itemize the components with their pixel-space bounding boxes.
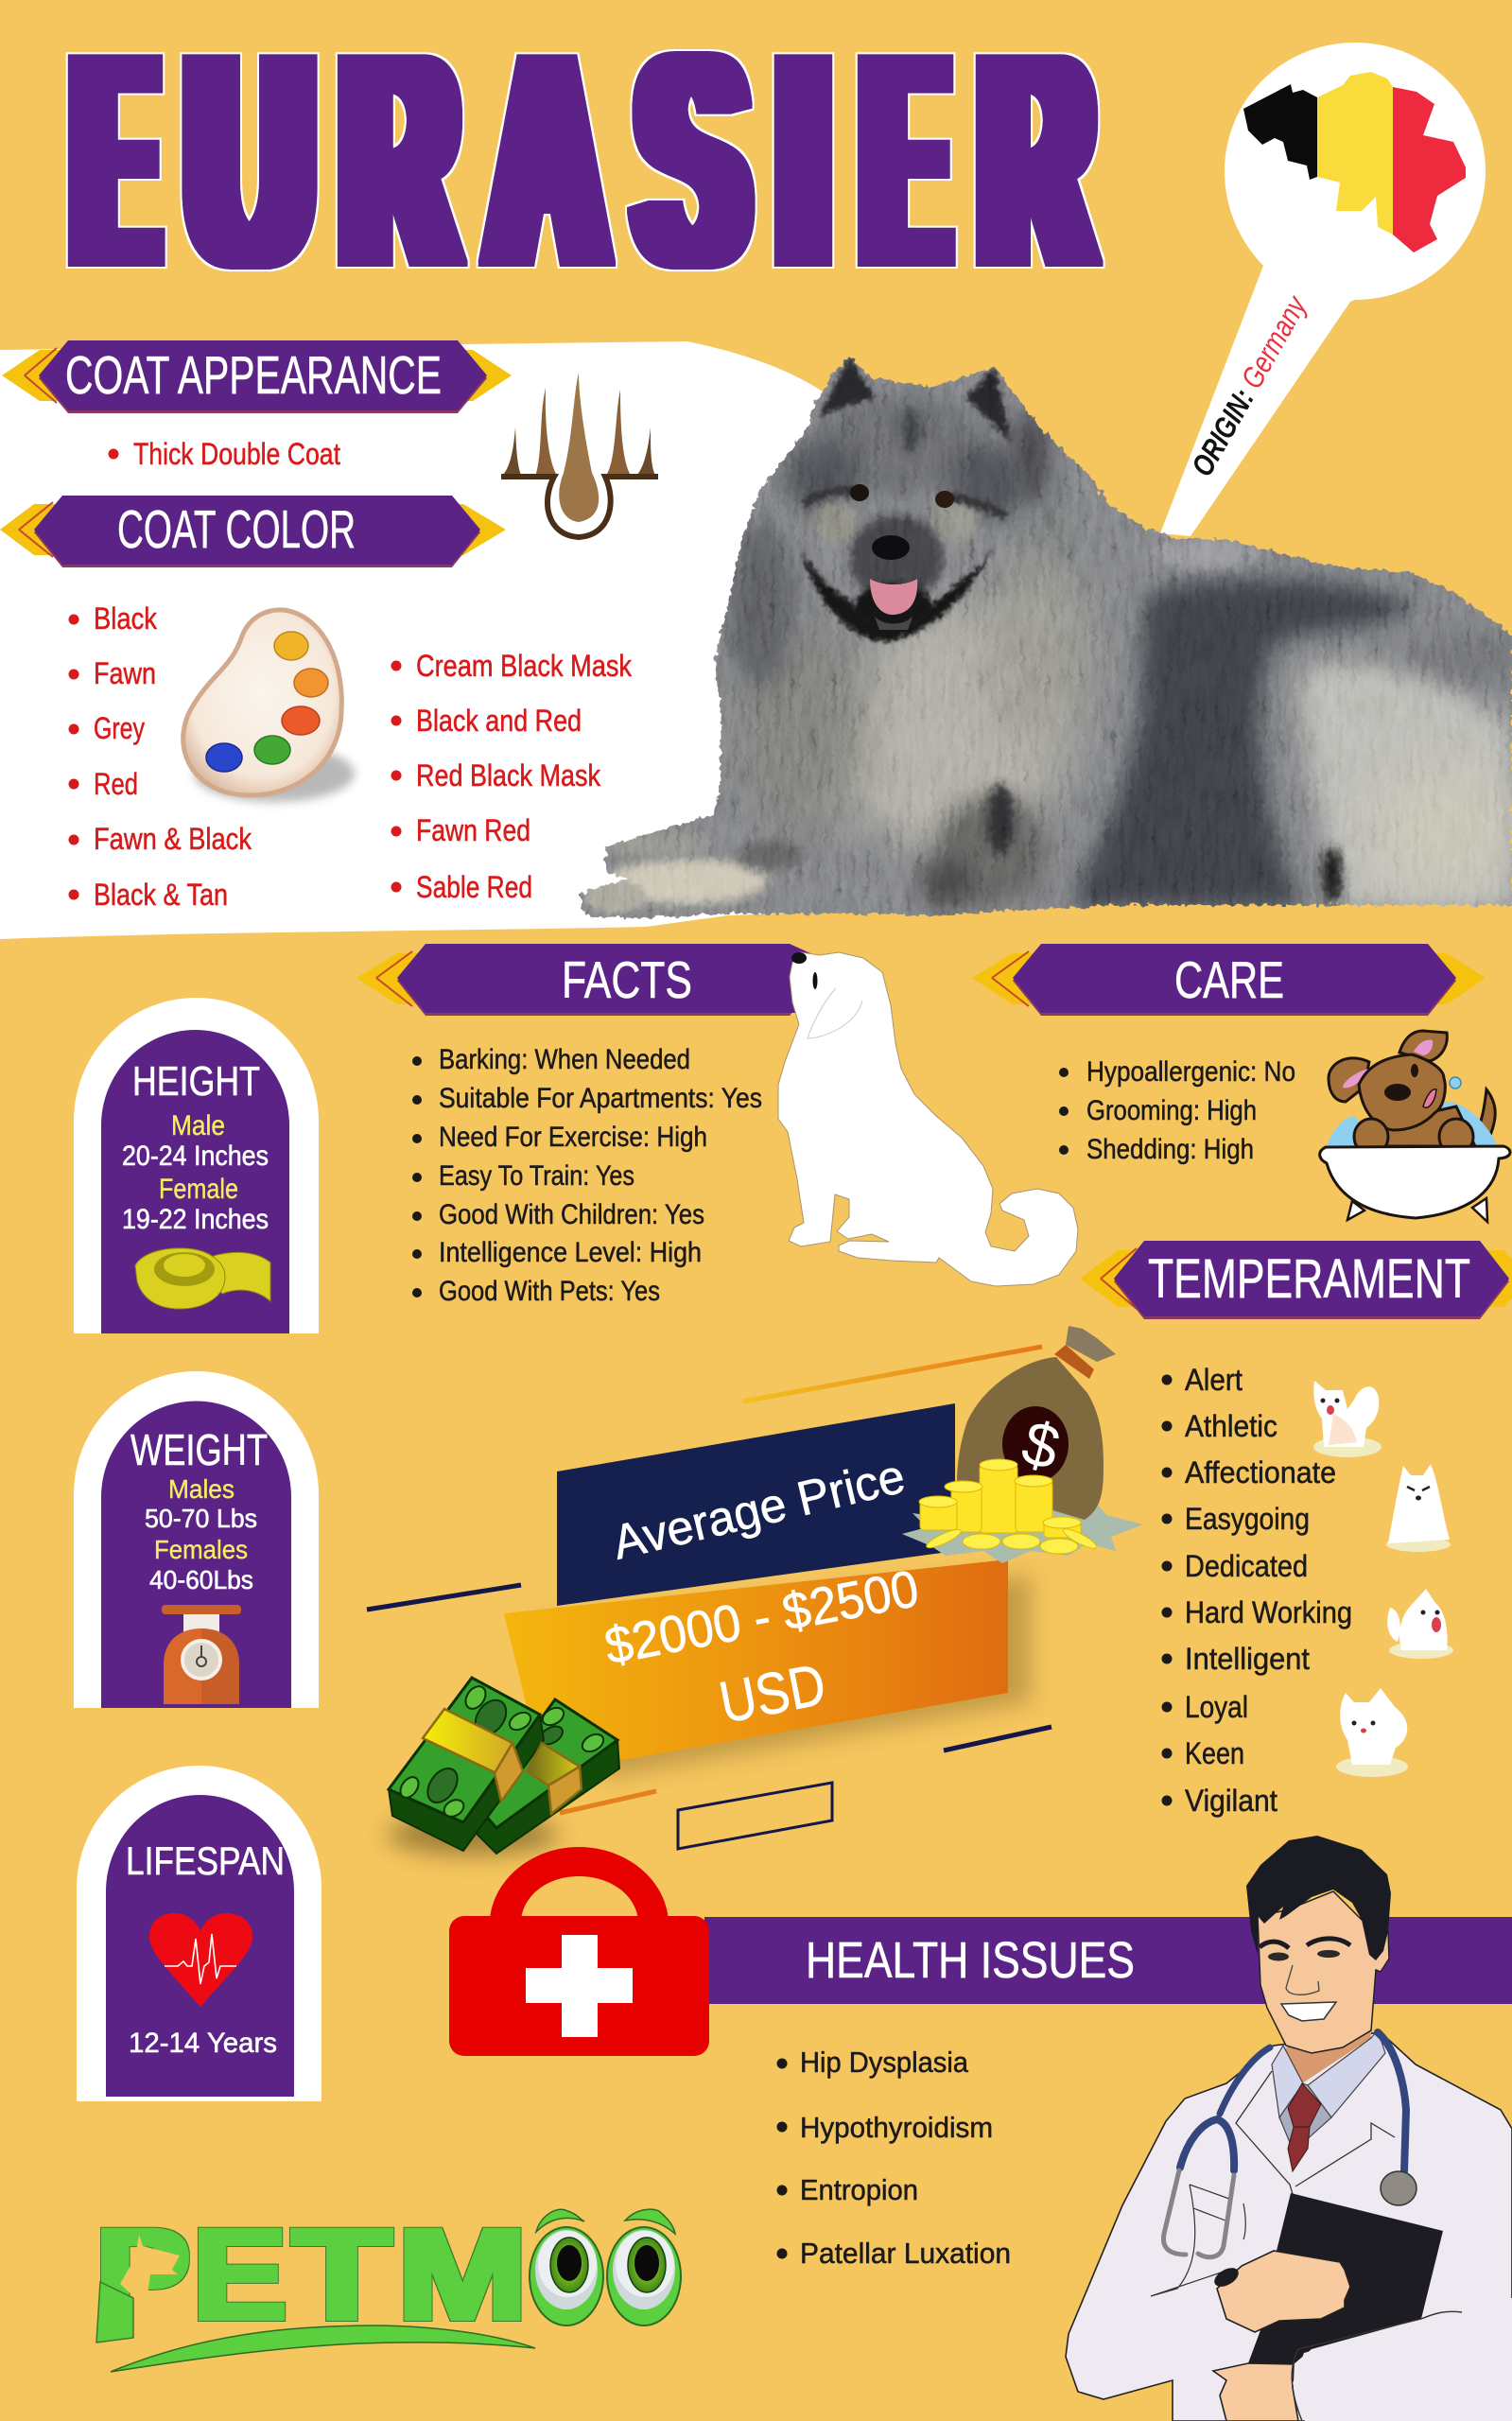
panel: average price bbox=[504, 1403, 1031, 1778]
logo wordmark: E bbox=[193, 2203, 287, 2347]
panel: weight arch: Females bbox=[154, 1535, 248, 1564]
logo wordmark: P bbox=[96, 2203, 190, 2347]
text: coat appearance item: Thick Double Coat bbox=[133, 437, 340, 471]
list: temperament: Alert bbox=[1185, 1363, 1243, 1397]
icon: money bag and coins: $ bbox=[1016, 1406, 1067, 1483]
shirt collar bbox=[1272, 2030, 1385, 2151]
banner: health issues band bbox=[704, 1917, 1512, 2004]
panel: height arch: HEIGHT bbox=[132, 1058, 260, 1105]
list: coat colors left: Fawn bbox=[94, 656, 156, 690]
banner: coat appearance bbox=[2, 340, 512, 413]
origin map pin bbox=[1160, 43, 1486, 536]
banner: care bbox=[972, 944, 1486, 1016]
logo eyes bbox=[530, 2209, 681, 2325]
icon: map of Belgium flag colours bbox=[1243, 72, 1466, 253]
icon: money bag and coins bbox=[902, 1326, 1143, 1563]
list: health issues: Hypothyroidism bbox=[800, 2111, 993, 2144]
list: temperament bbox=[1161, 1363, 1352, 1818]
coat lapels bbox=[1236, 2071, 1395, 2203]
list: facts: Intelligence Level: High bbox=[439, 1237, 702, 1268]
list: coat colors left: Black bbox=[94, 601, 158, 636]
panel: weight arch bbox=[74, 1371, 319, 1708]
list: health issues: Hip Dysplasia bbox=[800, 2046, 969, 2079]
list: facts bbox=[412, 1044, 762, 1307]
icon: paint palette bbox=[183, 610, 355, 802]
list: facts: Barking: When Needed bbox=[439, 1044, 690, 1075]
title: I bbox=[780, 0, 826, 328]
logo dog cutout bbox=[120, 2235, 180, 2301]
banner: health issues band: HEALTH ISSUES bbox=[806, 1932, 1135, 1989]
panel: height arch: Male bbox=[171, 1110, 225, 1141]
icon: dog in bathtub bbox=[1320, 1031, 1510, 1222]
list: temperament: Easygoing bbox=[1185, 1502, 1310, 1536]
tie bbox=[1288, 2083, 1321, 2171]
list: coat colors left: Red bbox=[94, 767, 138, 801]
banner: facts bbox=[356, 944, 832, 1016]
list: care: Hypoallergenic: No bbox=[1086, 1056, 1295, 1088]
white coat bbox=[1066, 2032, 1512, 2421]
list: care bbox=[1059, 1056, 1295, 1165]
dog fur body bbox=[567, 340, 1512, 927]
list: facts: Easy To Train: Yes bbox=[439, 1160, 634, 1192]
panel: lifespan arch: 12-14 Years bbox=[129, 2028, 277, 2059]
navy panel bbox=[557, 1403, 955, 1606]
list: temperament: Hard Working bbox=[1185, 1595, 1352, 1629]
logo: petmoo bbox=[96, 2203, 681, 2372]
panel: height arch bbox=[74, 998, 319, 1333]
illustration: doctor bbox=[1066, 1836, 1512, 2421]
left stack bbox=[389, 1678, 544, 1851]
title: U bbox=[189, 0, 311, 328]
icon: hair follicle bbox=[501, 373, 658, 537]
mane and chest tones bbox=[850, 605, 1068, 851]
title: A bbox=[492, 0, 603, 328]
banner: facts: FACTS bbox=[562, 950, 692, 1009]
title: E bbox=[78, 0, 152, 328]
list: health issues: Entropion bbox=[800, 2173, 918, 2206]
panel: weight arch: WEIGHT bbox=[130, 1425, 268, 1474]
head bbox=[1258, 1891, 1389, 2053]
banner: temperament bbox=[1080, 1241, 1512, 1319]
decorative lines and frame bbox=[367, 1585, 1051, 1849]
list: facts: Good With Pets: Yes bbox=[439, 1276, 660, 1307]
list: coat colors right bbox=[391, 649, 633, 904]
icon: small white dog 2 bbox=[1386, 1464, 1451, 1552]
list: facts: Good With Children: Yes bbox=[439, 1199, 704, 1230]
hair bbox=[1246, 1836, 1391, 1960]
panel: weight arch: 40-60Lbs bbox=[149, 1565, 253, 1594]
orange price panel: USD bbox=[715, 1652, 831, 1736]
list: temperament: Keen bbox=[1185, 1736, 1244, 1770]
right sleeve line bbox=[1292, 2311, 1462, 2421]
icon: small white dog 4 bbox=[1336, 1688, 1408, 1777]
list: coat colors right: Black and Red bbox=[416, 704, 582, 738]
decorative line: yellow orange bbox=[742, 1347, 1042, 1402]
list: temperament: Intelligent bbox=[1185, 1642, 1310, 1676]
icon: money stacks bbox=[388, 1678, 619, 1855]
icon: weighing scale bbox=[162, 1605, 241, 1704]
title: E bbox=[867, 0, 944, 328]
panel: height arch: Female bbox=[159, 1174, 238, 1205]
illustration: white dog silhouette bbox=[778, 952, 1078, 1286]
list: temperament: Loyal bbox=[1185, 1690, 1248, 1724]
list: coat colors left: Fawn & Black bbox=[94, 822, 252, 856]
head tones bbox=[818, 392, 988, 496]
list: coat colors right: Cream Black Mask bbox=[416, 649, 633, 683]
light haunch bbox=[1300, 666, 1512, 908]
orange price panel bbox=[504, 1559, 1008, 1761]
coat pocket bbox=[1151, 2185, 1245, 2296]
orange price panel: $2000 - $2500 bbox=[600, 1559, 923, 1676]
logo wordmark: M bbox=[397, 2203, 528, 2347]
list: temperament: Affectionate bbox=[1185, 1455, 1336, 1489]
list: health issues: Patellar Luxation bbox=[800, 2237, 1011, 2270]
list: facts: Suitable For Apartments: Yes bbox=[439, 1083, 762, 1114]
panel: weight arch: Males bbox=[168, 1474, 235, 1504]
gold coins bbox=[919, 1459, 1099, 1554]
icon: heart with pulse bbox=[149, 1913, 252, 2007]
list: care: Grooming: High bbox=[1086, 1095, 1257, 1126]
icon: first aid kit bbox=[449, 1847, 709, 2056]
panel: white coat section bbox=[0, 341, 946, 939]
banner: coat color: COAT COLOR bbox=[117, 499, 356, 560]
lower hand bbox=[1213, 2363, 1298, 2421]
panel: height arch: 20-24 Inches bbox=[122, 1141, 269, 1172]
list: temperament: Dedicated bbox=[1185, 1549, 1308, 1583]
panel: lifespan arch: LIFESPAN bbox=[126, 1838, 285, 1883]
list: temperament: Athletic bbox=[1185, 1409, 1277, 1443]
text: R bbox=[982, 0, 1089, 328]
sleeve cuff bbox=[1211, 2264, 1242, 2290]
dog face bbox=[850, 484, 954, 630]
banner: coat color bbox=[0, 496, 506, 567]
facial features bbox=[1260, 1939, 1350, 2021]
black mask crescent bbox=[802, 542, 998, 641]
list: coat colors right: Sable Red bbox=[416, 870, 532, 904]
banner: coat appearance: COAT APPEARANCE bbox=[65, 345, 442, 406]
list: coat colors left bbox=[68, 601, 252, 912]
right sleeve bbox=[1293, 2298, 1512, 2421]
dark back and flank band bbox=[1069, 579, 1418, 908]
panel: weight arch: 50-70 Lbs bbox=[145, 1504, 257, 1533]
money straps bbox=[423, 1709, 582, 1814]
legs bbox=[607, 859, 768, 904]
list: temperament: Vigilant bbox=[1185, 1784, 1277, 1818]
neck bbox=[1284, 2024, 1371, 2083]
logo wordmark: T bbox=[292, 2203, 391, 2347]
icon: tape measure bbox=[135, 1248, 270, 1309]
panel: lifespan arch bbox=[77, 1766, 322, 2101]
logo swoosh bbox=[111, 2325, 535, 2372]
navy panel: Average Price bbox=[607, 1449, 910, 1570]
icon: small white dog 1 bbox=[1313, 1381, 1382, 1457]
upper hand bbox=[1217, 2251, 1350, 2332]
orange shadow bbox=[530, 1575, 1031, 1778]
list: coat colors right: Red Black Mask bbox=[416, 758, 601, 792]
pin shape bbox=[1160, 43, 1486, 536]
origin label: ORIGIN: Germany bbox=[1185, 289, 1313, 481]
list: coat colors left: Black & Tan bbox=[94, 878, 228, 912]
title: R bbox=[344, 0, 454, 328]
right stack bbox=[475, 1699, 619, 1854]
list: facts: Need For Exercise: High bbox=[439, 1122, 707, 1153]
banner: care: CARE bbox=[1174, 950, 1284, 1009]
logo P stem extension bbox=[96, 2282, 133, 2343]
list: coat colors right: Fawn Red bbox=[416, 813, 530, 847]
icon: small white dog 3 bbox=[1387, 1589, 1453, 1659]
stethoscope bbox=[1163, 2032, 1406, 2257]
list: coat colors left: Grey bbox=[94, 711, 145, 745]
list: care: Shedding: High bbox=[1086, 1134, 1254, 1165]
illustration: eurasier dog bbox=[567, 340, 1512, 927]
clipboard bbox=[1248, 2193, 1443, 2364]
panel: height arch: 19-22 Inches bbox=[122, 1204, 269, 1235]
title: S bbox=[639, 0, 744, 328]
list: health issues bbox=[777, 2046, 1011, 2270]
